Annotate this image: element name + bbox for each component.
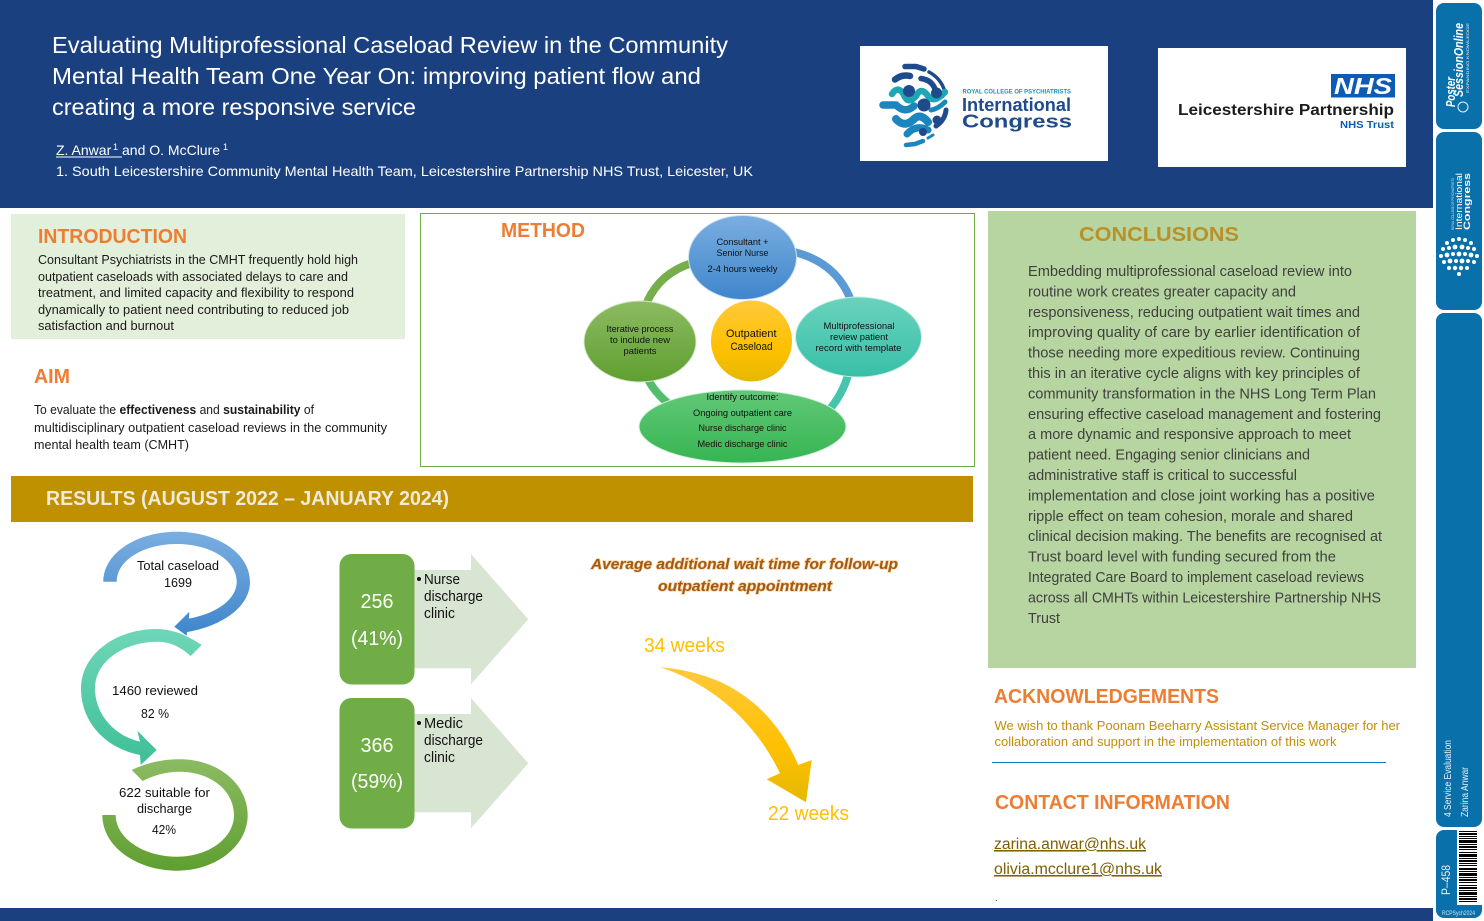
panel: aim — [34, 366, 388, 452]
sidebar tab: category and author: Zarina Anwar — [1459, 767, 1471, 817]
heading: method: METHOD — [501, 220, 585, 242]
header banner — [0, 0, 1433, 208]
title: creating a more responsive service — [52, 94, 416, 120]
node: iterative process — [584, 301, 696, 382]
logo: NHS Leicestershire Partnership — [1158, 48, 1406, 167]
text: introduction body: dynamically to patient need contributing to reduced job — [38, 303, 349, 317]
heading: wait time: Average additional wait time for follow-up — [590, 556, 898, 573]
chart: wait time reduction arrow: 34 weeks — [644, 635, 725, 657]
heading: introduction: INTRODUCTION — [38, 226, 187, 248]
node: identify outcome: Nurse discharge clinic — [698, 422, 787, 433]
authors: Z. Anwar — [56, 142, 112, 158]
heading: wait time: outpatient appointment — [658, 578, 833, 595]
text: conclusions body: Trust — [1028, 611, 1060, 627]
title: Mental Health Team One Year On: improving patient flow and — [52, 63, 701, 89]
text: conclusions body: implementation and close joint working has a positive — [1028, 488, 1375, 504]
text: conclusions body: Trust board level with funding secured from the — [1028, 550, 1336, 566]
sidebar tab: category and author — [1436, 313, 1482, 827]
logo: NHS Leicestershire Partnership: Leicestershire Partnership — [1178, 102, 1394, 119]
text: conclusions body: administrative staff is critical to successful — [1028, 468, 1297, 484]
text: introduction body: treatment, and limited capacity and flexibility to respond — [38, 286, 354, 300]
chart: wait time reduction arrow: 22 weeks — [768, 803, 849, 825]
footer bar — [0, 908, 1433, 921]
text: acknowledgements body: We wish to thank Poonam Beeharry Assistant Service Manager for her — [994, 719, 1400, 733]
text: conclusions body: those needing more expeditious review. Continuing — [1028, 346, 1360, 362]
sidebar tab: International Congress: Congress — [1462, 173, 1472, 230]
text: aim body — [34, 403, 388, 452]
arrow: suitable for discharge: discharge — [137, 801, 192, 816]
breakdown: nurse discharge clinic: 256 — [360, 590, 394, 613]
breakdown: nurse discharge clinic: discharge — [424, 588, 483, 605]
node: consultant and senior nurse: Consultant + — [716, 236, 769, 247]
affiliation: 1. South Leicestershire Community Mental Health Team, Leicestershire Partnership NHS Trust, Leicester, UK — [56, 163, 754, 179]
sidebar tab: poster number and barcode: RCPSych2024 — [1442, 910, 1475, 917]
node: outpatient caseload centre — [710, 300, 792, 382]
breakdown: medic discharge clinic: discharge — [424, 732, 483, 749]
text: conclusions body: ensuring effective caseload management and fostering — [1028, 407, 1381, 423]
node: multiprofessional review: review patient — [830, 331, 888, 342]
contact emails: olivia.mcclure1@nhs.uk — [994, 861, 1162, 878]
text: aim body: mental health team (CMHT) — [34, 438, 189, 452]
chart: wait time reduction arrow — [644, 635, 849, 825]
contact emails: zarina.anwar@nhs.uk — [994, 836, 1146, 853]
node: identify outcome: Ongoing outpatient care — [693, 407, 792, 418]
heading: wait time — [590, 556, 898, 595]
text: acknowledgements body — [994, 719, 1400, 749]
sidebar tab: International Congress: International — [1454, 173, 1464, 230]
text: conclusions body: a more dynamic and responsive approach to meet — [1028, 427, 1351, 443]
heading: acknowledgements: ACKNOWLEDGEMENTS — [994, 686, 1219, 708]
logo: RCPsych International Congress: International — [962, 95, 1071, 115]
text: conclusions body: routine work creates greater capacity and — [1028, 284, 1296, 300]
text: conclusions body: across all CMHTs within Leicestershire Partnership NHS — [1028, 590, 1381, 606]
logo: RCPsych International Congress — [860, 46, 1108, 161]
text: conclusions body: ripple effect on team cohesion, morale and shared — [1028, 509, 1353, 525]
node: multiprofessional review: Multiprofessional — [824, 320, 894, 331]
node: consultant and senior nurse: Senior Nurse — [716, 247, 768, 258]
sidebar tab: poster number and barcode: P–458 — [1439, 865, 1453, 895]
text: conclusions body: improving quality of care by earlier identification of — [1028, 325, 1361, 341]
breakdown: nurse discharge clinic: (41%) — [351, 627, 403, 650]
node: iterative process: to include new — [610, 334, 670, 345]
arrow: reviewed — [81, 629, 202, 765]
arrow: suitable for discharge — [102, 759, 248, 871]
sidebar tab: Poster Session Online: EXPANDING KNOWLEDGE — [1465, 23, 1470, 93]
breakdown: medic discharge clinic: 366 — [360, 734, 394, 757]
node: identify outcome: Medic discharge clinic — [698, 438, 788, 449]
arrow: suitable for discharge: 622 suitable for — [119, 785, 211, 800]
node: iterative process: patients — [624, 345, 657, 356]
text: conclusions body: this in an iterative cycle aligns with key principles of — [1028, 366, 1361, 382]
breakdown: medic discharge clinic: (59%) — [351, 770, 403, 793]
arrow: reviewed: 82 % — [141, 706, 169, 721]
results banner: RESULTS (AUGUST 2022 – JANUARY 2024) — [46, 488, 449, 510]
breakdown: medic discharge clinic: clinic — [424, 749, 455, 766]
arrow: suitable for discharge: 42% — [152, 822, 176, 837]
text: aim body: multidisciplinary outpatient caseload reviews in the community — [34, 421, 388, 435]
node: outpatient caseload centre: Caseload — [730, 341, 772, 353]
text: conclusions body: Embedding multiprofessional caseload review into — [1028, 264, 1352, 280]
text: conclusions body: clinical decision making. The benefits are recognised at — [1028, 529, 1382, 545]
arrow: total caseload: 1699 — [164, 575, 192, 590]
text: introduction body — [38, 253, 358, 333]
heading: contact information: CONTACT INFORMATION — [995, 792, 1230, 814]
sidebar tab: International Congress — [1436, 132, 1482, 310]
title: Evaluating Multiprofessional Caseload Review in the Community — [52, 32, 728, 58]
logo: RCPsych International Congress: ROYAL COLLEGE OF PSYCHIATRISTS — [962, 88, 1072, 96]
sidebar tab: Poster Session Online — [1436, 3, 1482, 129]
node: identify outcome — [639, 390, 846, 463]
flow: caseload funnel — [81, 532, 250, 871]
authors — [56, 142, 228, 158]
sidebar tab: poster number and barcode — [1436, 830, 1482, 918]
heading: conclusions: CONCLUSIONS — [1079, 224, 1239, 246]
results banner — [11, 476, 973, 522]
panel: introduction — [11, 214, 405, 339]
sidebar tab: Poster Session Online: Poster — [1443, 76, 1458, 107]
arrow: reviewed: 1460 reviewed — [112, 683, 198, 698]
node: consultant and senior nurse: 2-4 hours weekly — [708, 263, 778, 274]
authors: 1 — [223, 142, 228, 152]
breakdown: nurse discharge clinic — [340, 554, 528, 684]
breakdown: medic discharge clinic: Medic — [424, 715, 463, 732]
panel: method — [420, 214, 974, 466]
logo: RCPsych International Congress: Congress — [962, 112, 1072, 132]
text: conclusions body — [1028, 264, 1382, 627]
cycle arcs — [647, 252, 850, 409]
node: multiprofessional review — [796, 297, 922, 377]
text: introduction body: Consultant Psychiatrists in the CMHT frequently hold high — [38, 253, 358, 267]
node: iterative process: Iterative process — [606, 323, 674, 334]
text: conclusions body: patient need. Engaging senior clinicians and — [1028, 448, 1310, 464]
title — [52, 32, 728, 120]
breakdown: nurse discharge clinic: clinic — [424, 605, 455, 622]
node: consultant and senior nurse — [688, 216, 796, 300]
arrow: total caseload: Total caseload — [137, 558, 219, 573]
authors: 1 — [113, 142, 118, 152]
text: conclusions body: community transformation in the NHS Long Term Plan — [1028, 386, 1376, 402]
text: conclusions body: responsiveness, reducing outpatient wait times and — [1028, 305, 1360, 321]
node: identify outcome: Identify outcome: — [706, 391, 778, 402]
heading: aim: AIM — [34, 366, 70, 388]
text: introduction body: outpatient caseloads with associated delays to care and — [38, 270, 348, 284]
text: acknowledgements body: collaboration and support in the implementation of this work — [994, 735, 1337, 749]
panel: conclusions — [988, 211, 1416, 668]
breakdown: medic discharge clinic — [340, 698, 528, 828]
text: . — [995, 893, 998, 903]
sidebar tab: category and author: 4 Service Evaluation — [1442, 740, 1454, 817]
contact emails — [994, 836, 1162, 878]
text: aim body: To evaluate the effectiveness and sustainability of — [34, 403, 314, 417]
authors: and O. McClure — [122, 142, 220, 158]
arrow: total caseload — [103, 532, 250, 636]
breakdown: nurse discharge clinic: Nurse — [424, 571, 460, 588]
sidebar tab: Poster Session Online: SessionOnline — [1451, 23, 1466, 97]
logo: NHS Leicestershire Partnership: NHS Trust — [1340, 119, 1395, 131]
logo: NHS Leicestershire Partnership: NHS — [1334, 73, 1393, 99]
node: multiprofessional review: record with template — [816, 342, 902, 353]
node: outpatient caseload centre: Outpatient — [726, 328, 776, 340]
sidebar tab: International Congress: ROYAL COLLEGE OF PSYCHIATRISTS — [1451, 177, 1455, 230]
text: conclusions body: Integrated Care Board to implement caseload reviews — [1028, 570, 1364, 586]
text: introduction body: satisfaction and burnout — [38, 319, 174, 333]
